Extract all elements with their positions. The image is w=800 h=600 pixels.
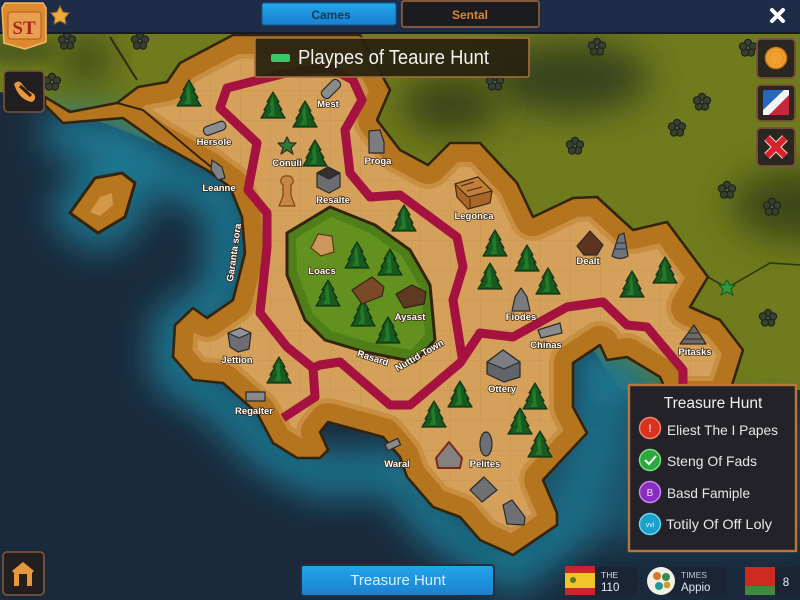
place labels: Dealt: [576, 256, 600, 267]
side button: coin: [757, 39, 795, 78]
place labels: Proga: [365, 156, 392, 167]
place labels: Aysast: [395, 312, 426, 323]
place labels: Legonca: [454, 211, 494, 222]
place labels: Garanta sora: [225, 222, 244, 282]
tab: Cames: [262, 3, 396, 25]
logo badge: [2, 3, 46, 49]
side button: home: [3, 552, 44, 595]
tab: Cames: Cames: [311, 8, 351, 22]
side button: flag: [757, 85, 795, 121]
place labels: Pitasks: [678, 347, 712, 358]
legend row 1: !: [648, 423, 652, 435]
legend row 4: Totily Of Off Loly: [666, 516, 772, 532]
legend row 2: Steng Of Fads: [667, 453, 757, 469]
legend row 1: Eliest The I Papes: [667, 422, 778, 438]
side button: phone: [4, 71, 44, 112]
ground texture bushes: [43, 32, 781, 326]
icon: star: [51, 6, 69, 24]
trees: [177, 80, 677, 457]
icon: close: [772, 10, 783, 21]
place labels: Pelites: [470, 459, 500, 470]
stat: apple badge: Appio: [681, 582, 710, 594]
place labels: Chinas: [530, 340, 562, 351]
place labels: Leanne: [202, 183, 236, 194]
legend row 4: [640, 514, 772, 534]
stat: Spain flag: 110: [601, 582, 619, 594]
stat: red-green flag: 8: [783, 577, 789, 589]
map landmarks: [202, 78, 735, 525]
olive grassland: [0, 33, 800, 390]
stat: red-green flag: [745, 567, 800, 595]
tab: Sental: [402, 1, 539, 27]
stat: apple badge: TIMES: [681, 570, 707, 580]
legend title: Treasure Hunt: [664, 395, 763, 412]
place labels: Rasard: [356, 348, 390, 369]
place labels: Mest: [317, 99, 340, 110]
mainland: [45, 35, 743, 555]
shallow water halo: [45, 130, 660, 570]
legend row 3: B: [647, 488, 654, 499]
place labels: Hersole: [197, 137, 231, 148]
main button: [301, 565, 494, 596]
title banner: [255, 38, 529, 77]
legend row 3: Basd Famiple: [667, 485, 750, 501]
place labels: Fiodes: [506, 312, 536, 323]
legend panel: [629, 385, 796, 551]
place labels: Waral: [384, 459, 410, 470]
place labels: Nuttid Town: [394, 337, 446, 374]
tab: Sental: Sental: [452, 8, 488, 22]
legend row 3: [640, 482, 750, 502]
stat: Spain flag: [565, 566, 637, 595]
legend row 2: [640, 450, 757, 470]
stat: apple badge: [647, 567, 727, 595]
place labels: Regalter: [235, 406, 273, 417]
legend row 1: [640, 418, 778, 438]
side button: red cross: [757, 128, 795, 166]
island: [70, 173, 135, 233]
place labels: Conuli: [272, 158, 302, 169]
green meadow: [287, 207, 435, 362]
top bar: [0, 0, 800, 34]
red roads: [220, 68, 683, 418]
logo badge: ST: [12, 18, 36, 39]
place labels: Jettion: [221, 355, 253, 366]
stat: Spain flag: THE: [601, 570, 618, 580]
legend row 4: vvi: [646, 522, 655, 529]
place labels: Loacs: [308, 266, 336, 277]
place labels: Resalte: [316, 195, 350, 206]
place labels: [197, 99, 712, 470]
main button: Treasure Hunt: [350, 572, 446, 589]
title banner: Playpes of Teaure Hunt: [298, 47, 489, 69]
place labels: Ottery: [488, 384, 517, 395]
